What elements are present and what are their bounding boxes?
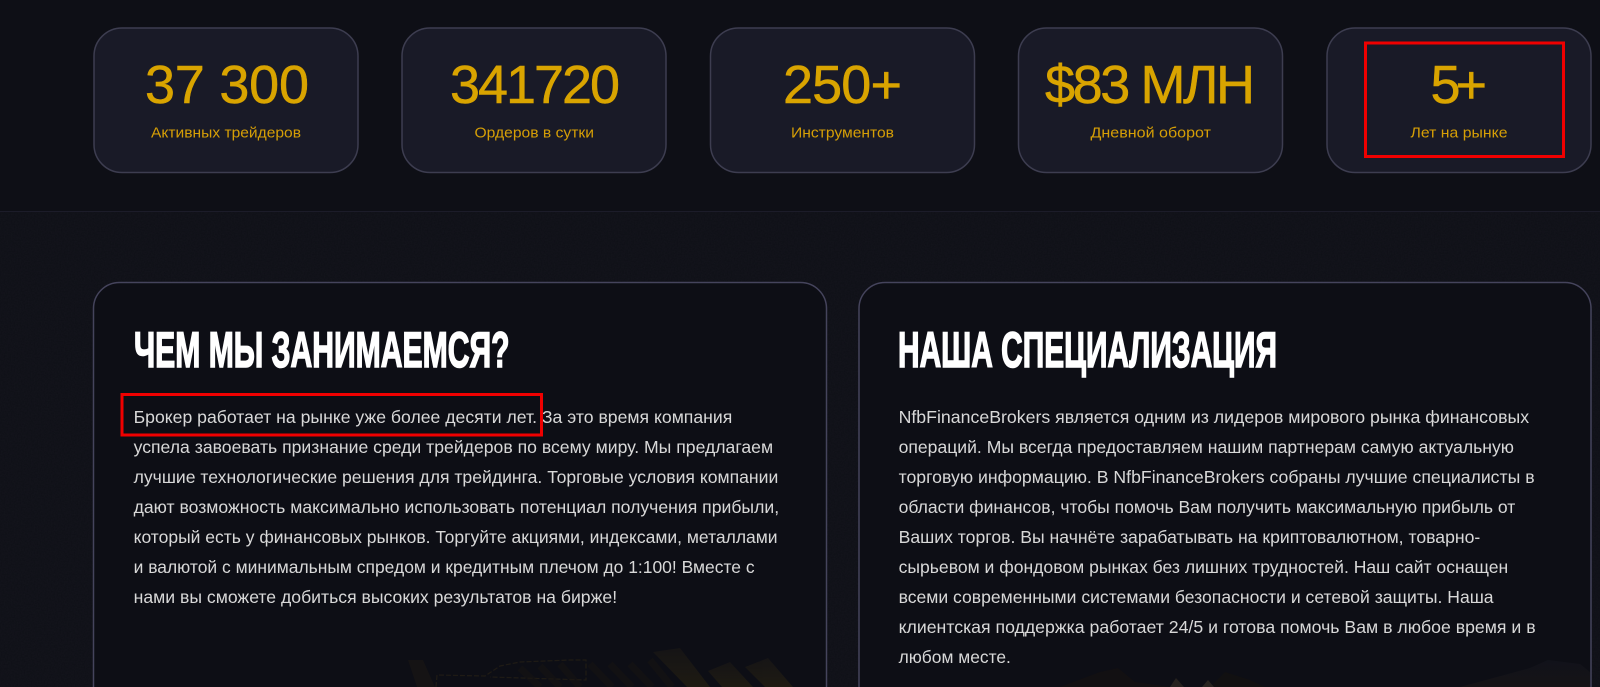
- panel: stat active traders: [94, 28, 358, 172]
- callout: red highlight on first sentence: [122, 394, 542, 435]
- lower background section: [0, 211, 1600, 687]
- text block: what we do: лучшие технологические решения для трейдинга. Торговые условия компании: [134, 467, 778, 487]
- number: 37 300: 37 300: [145, 55, 309, 115]
- label: daily turnover: Дневной оборот: [1090, 124, 1211, 142]
- label: orders per day: Ордеров в сутки: [474, 124, 594, 142]
- text block: our specialization: NfbFinanceBrokers является одним из лидеров мирового рынка финансовых: [899, 407, 1529, 427]
- panel: stat daily turnover: [1018, 28, 1282, 172]
- number: 341720: 341720: [450, 55, 620, 115]
- text block: what we do: успела завоевать признание среди трейдеров по всему миру. Мы предлагаем: [134, 437, 773, 457]
- label: years on market: Лет на рынке: [1410, 124, 1508, 142]
- text block: our specialization: торговую информацию. В NfbFinanceBrokers собраны лучшие специалисты в: [899, 467, 1535, 487]
- background art: mountains: [1060, 660, 1590, 687]
- number: 5+: 5+: [1430, 55, 1487, 115]
- panel: stat orders per day: [402, 28, 666, 172]
- number: $83 MLN: $83 МЛН: [1045, 55, 1255, 115]
- text block: our specialization: Ваших торгов. Вы начнёте зарабатывать на криптовалютном, товарно-: [899, 527, 1480, 547]
- text block: what we do: [134, 407, 779, 607]
- text block: our specialization: сырьевом и фондовом рынках без лишних трудностей. Наш сайт оснащен: [899, 557, 1508, 577]
- heading: what we do: ЧЕМ МЫ ЗАНИМАЕМСЯ?: [134, 322, 510, 378]
- text block: our specialization: области финансов, чтобы помочь Вам получить максимальную прибыль от: [899, 497, 1515, 517]
- text block: what we do: нами вы сможете добиться высоких результатов на бирже!: [134, 587, 617, 607]
- panel: what we do: [94, 282, 826, 687]
- text block: what we do: дают возможность максимально использовать потенциал получения прибыли,: [134, 497, 779, 517]
- text block: our specialization: клиентская поддержка работает 24/5 и готова помочь Вам в любое время и в: [899, 617, 1536, 637]
- text block: our specialization: всеми современными системами безопасности и сетевой защиты. Наша: [899, 587, 1494, 607]
- panel: stat years on market: [1327, 28, 1591, 172]
- text block: our specialization: операций. Мы всегда предоставляем нашим партнерам самую актуальную: [899, 437, 1514, 457]
- text block: what we do: Брокер работает на рынке уже более десяти лет. За это время компания: [134, 407, 732, 427]
- panel: stat instruments: [710, 28, 974, 172]
- heading: our specialization: НАША СПЕЦИАЛИЗАЦИЯ: [898, 322, 1277, 378]
- label: instruments: Инструментов: [791, 124, 894, 142]
- text block: what we do: и валютой с минимальным спредом и кредитным плечом до 1:100! Вместе с: [134, 557, 755, 577]
- callout: red highlight on years on market: [1366, 43, 1564, 156]
- text block: our specialization: любом месте.: [899, 647, 1011, 667]
- background art: gold chart bars: [408, 648, 793, 687]
- text block: what we do: который есть у финансовых рынков. Торгуйте акциями, индексами, металлами: [134, 527, 778, 547]
- panel: our specialization: [859, 282, 1591, 687]
- number: 250+: 250+: [783, 55, 902, 115]
- text block: our specialization: [899, 407, 1536, 667]
- label: active traders: Активных трейдеров: [151, 124, 301, 142]
